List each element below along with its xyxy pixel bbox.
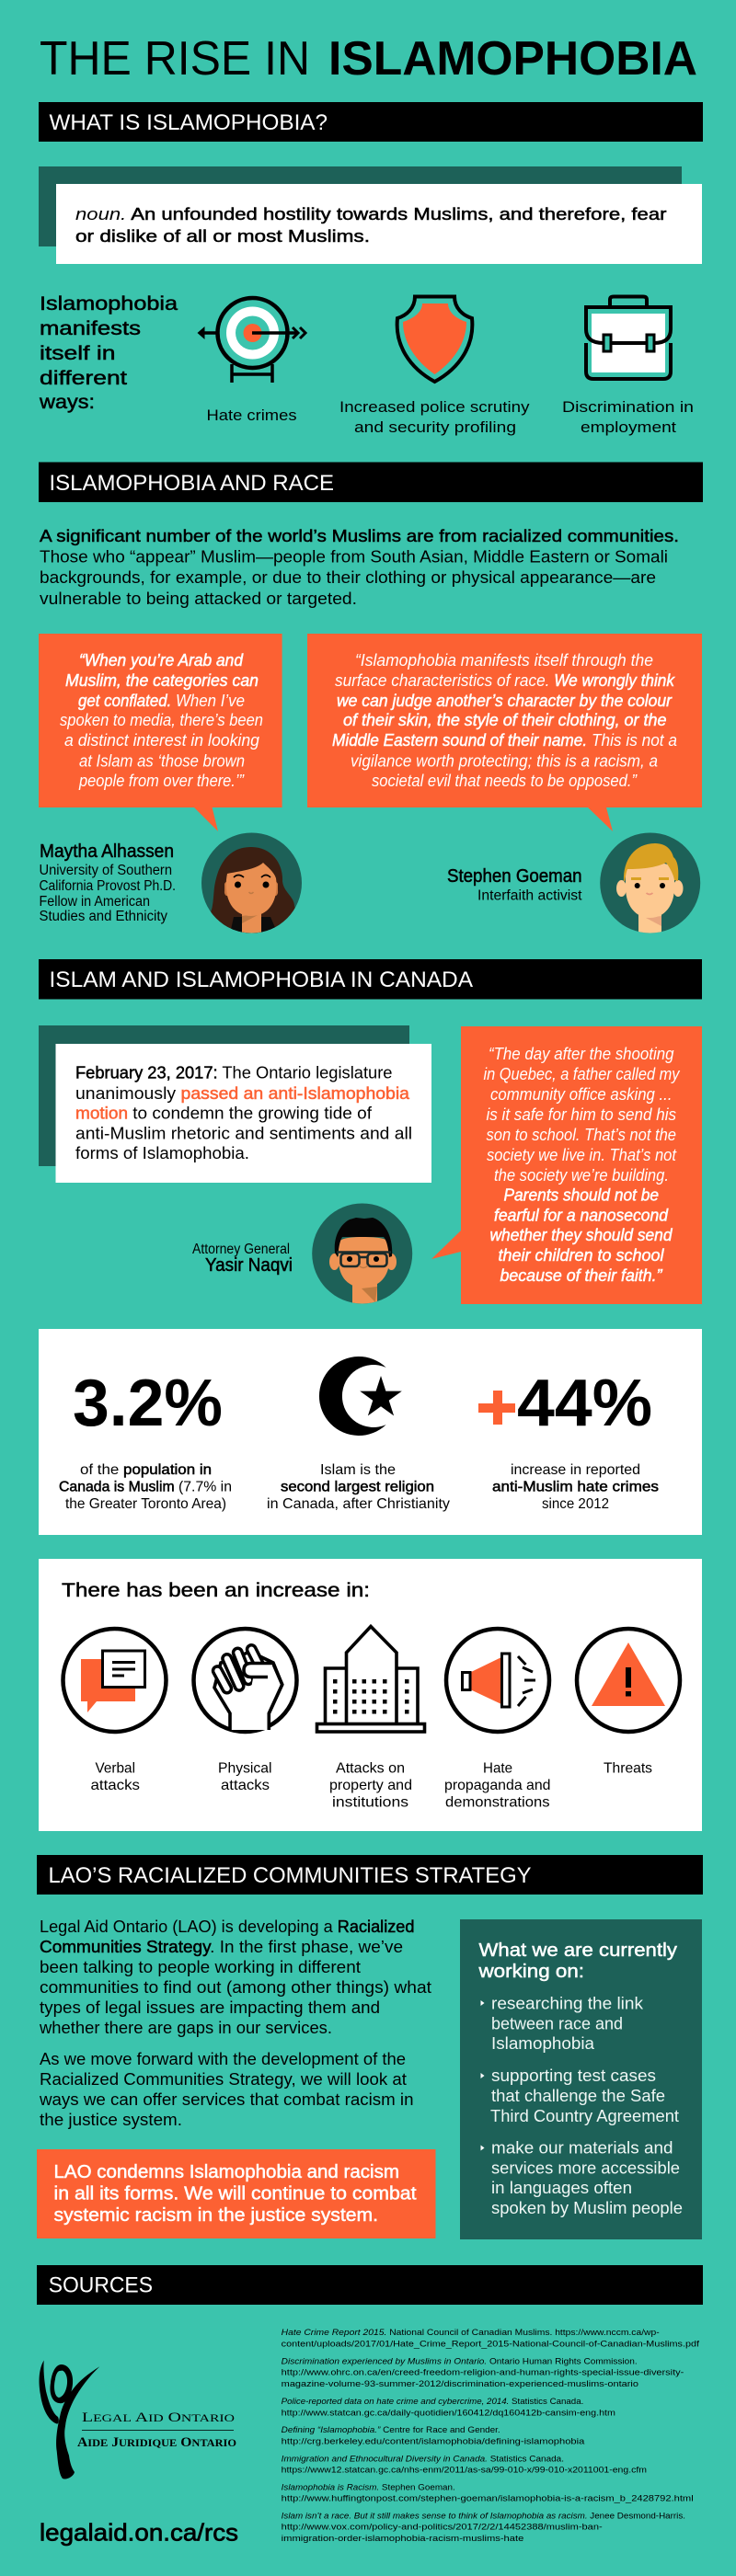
text: source list: http://crg.berkeley.edu/content/islamophobia/defining-islamophobia (282, 2436, 585, 2446)
caption: hate crimes: Hate crimes (206, 406, 296, 424)
text: strategy description: ways we can offer services that combat racism in (39, 2089, 414, 2109)
callout: quote from Yasir Naqvi: community office asking ... (490, 1085, 672, 1104)
text: strategy description: As we move forward with the development of the (40, 2049, 406, 2068)
caption: second largest religion: Islam is the (320, 1462, 396, 1478)
text: source list: immigration-order-islamophobia-racism-muslims-hate (282, 2534, 523, 2544)
text: strategy description: whether there are gaps in our services. (39, 2018, 332, 2037)
text: manifests itself: ways: (39, 392, 95, 413)
label: threats: Threats (604, 1760, 652, 1777)
callout: quote from Yasir Naqvi: is it safe for him to send his (486, 1105, 676, 1124)
section heading: lao strategy: LAO’S RACIALIZED COMMUNITIES STRATEGY (48, 1863, 532, 1888)
icon: speech bubbles (63, 1629, 166, 1732)
section heading: lao strategy (37, 1855, 703, 1895)
title: ISLAMOPHOBIA (328, 32, 697, 86)
motion text: anti-Muslim rhetoric and sentiments and all (75, 1124, 412, 1142)
callout: quote from Yasir Naqvi: fearful for a nanosecond (494, 1207, 669, 1225)
caption: police scrutiny: and security profiling (354, 418, 516, 436)
label: physical attacks (218, 1760, 272, 1793)
motion text: motion to condemn the growing tide of (75, 1104, 373, 1122)
panel: current work (460, 1919, 702, 2239)
callout: quote from Yasir Naqvi: because of their faith.” (500, 1266, 662, 1285)
bullet: materials and services: spoken by Muslim people (491, 2199, 683, 2217)
panel: ontario legislature motion (39, 1025, 431, 1183)
text: source list: Hate Crime Report 2015. National Council of Canadian Muslims. https://www.nccm.ca/wp- (282, 2328, 660, 2338)
caption: hate crime increase: increase in reported (511, 1462, 640, 1478)
text: manifests itself (39, 293, 178, 413)
logo figure (40, 2360, 99, 2479)
icon: briefcase (586, 296, 671, 379)
callout: quote from Yasir Naqvi: the society we’re building. (494, 1166, 669, 1185)
section heading: what is islamophobia: WHAT IS ISLAMOPHOBIA? (50, 110, 328, 135)
section heading: islam and islamophobia in canada (39, 959, 702, 999)
text: source list: content/uploads/2017/01/Hate_Crime_Report_2015-National-Council-of-Canadian-Muslims.pdf (282, 2339, 699, 2349)
panel heading: What we are currently (478, 1940, 678, 1961)
callout: quote from Yasir Naqvi: son to school. That’s not the (486, 1126, 676, 1144)
text: racialized communities paragraph: A significant number of the world’s Muslims are from racialized communities. (40, 526, 679, 545)
attribution: Yasir Naqvi: Attorney General (192, 1242, 290, 1257)
logo wordmark: L EGAL A ID O NTARIO (82, 2410, 235, 2425)
callout: quote from Yasir Naqvi (431, 1026, 702, 1304)
attribution: Maytha Alhassen: University of Southern (39, 863, 172, 878)
label: physical attacks: Physical (218, 1760, 272, 1777)
caption: hate crime increase (492, 1462, 659, 1512)
caption: second largest religion (267, 1462, 450, 1512)
label: attacks on property: property and (329, 1778, 412, 1793)
callout: quote from Stephen Goeman: vigilance worth protecting; this is a racism, a (351, 752, 658, 771)
stat: 3.2%: 3.2% (73, 1367, 223, 1440)
section heading: sources: SOURCES (49, 2273, 153, 2298)
callout: LAO condemns: in all its forms. We will continue to combat (53, 2183, 417, 2204)
icon: warning triangle (577, 1629, 680, 1732)
callout: quote from Maytha Alhassen: at Islam as ‘those brown (79, 752, 245, 771)
section heading: islamophobia and race: ISLAMOPHOBIA AND RACE (50, 471, 334, 496)
section heading: islam and islamophobia in canada: ISLAM AND ISLAMOPHOBIA IN CANADA (50, 967, 474, 992)
section heading: islamophobia and race (39, 462, 703, 502)
bullet: researching the link (480, 1994, 644, 2053)
text: source list: Islamophobia is Racism. Stephen Goeman. (282, 2482, 455, 2492)
text: manifests itself: different (40, 368, 127, 389)
callout: quote from Maytha Alhassen: spoken to media, there’s been (60, 711, 263, 729)
callout: LAO condemns (37, 2149, 436, 2238)
stat: 44%: 44% (517, 1367, 652, 1440)
title (40, 32, 697, 86)
logo wordmark (77, 2410, 236, 2450)
text: strategy description (39, 1917, 431, 2129)
text: source list: Discrimination experienced by Muslims in Ontario. Ontario Human Rights Commission. (282, 2356, 638, 2366)
text: source list: http://www.vox.com/policy-and-politics/2017/2/2/14452388/muslim-ban- (282, 2523, 603, 2533)
callout: quote from Maytha Alhassen: get conflated. When I’ve (78, 692, 245, 710)
text: source list: Immigration and Ethnocultural Diversity in Canada. Statistics Canada. (282, 2454, 564, 2464)
motion text: February 23, 2017: The Ontario legislature (75, 1063, 392, 1082)
title: THE RISE IN (40, 32, 310, 86)
callout: quote from Maytha Alhassen: Muslim, the categories can (65, 671, 259, 690)
icon: building (316, 1626, 425, 1732)
label: attacks on property (329, 1760, 412, 1810)
icon: plus sign (478, 1391, 515, 1425)
bullet: researching the link: between race and (491, 2014, 623, 2032)
bullet: supporting test cases (480, 2067, 679, 2125)
text: source list: http://www.ohrc.on.ca/en/creed-freedom-religion-and-human-rights-special-issue-diversity- (282, 2368, 684, 2378)
callout: quote from Stephen Goeman: Middle Eastern sound of their name. This is not a (332, 731, 677, 750)
attribution: Maytha Alhassen: California Provost Ph.D. (39, 878, 176, 894)
callout: quote from Stephen Goeman: we can judge another’s character by the colour (337, 692, 673, 710)
text: strategy description: communities to find out (among other things) what (40, 1977, 431, 1997)
label: hate propaganda: demonstrations (445, 1795, 550, 1810)
attribution: Maytha Alhassen: Fellow in American (39, 894, 150, 910)
callout: quote from Maytha Alhassen (39, 634, 282, 831)
label: hate propaganda: propaganda and (444, 1778, 550, 1793)
attribution: Stephen Goeman: Stephen Goeman (447, 866, 581, 887)
text: strategy description: Legal Aid Ontario (LAO) is developing a Racialized (40, 1917, 414, 1936)
motion text (75, 1063, 412, 1162)
text: strategy description: Racialized Communities Strategy, we will look at (40, 2069, 407, 2089)
caption: second largest religion: in Canada, after Christianity (267, 1496, 450, 1512)
callout: quote from Yasir Naqvi: Parents should not be (504, 1186, 659, 1205)
caption: hate crime increase: anti-Muslim hate crimes (492, 1479, 659, 1495)
text: strategy description: types of legal issues are impacting them and (40, 1998, 380, 2017)
icon: portrait of Stephen Goeman (600, 833, 700, 938)
callout: quote from Maytha Alhassen: people from over there.’” (78, 772, 245, 790)
callout: quote from Maytha Alhassen: a distinct interest in looking (64, 731, 259, 750)
text: source list: Defining “Islamophobia.” Centre for Race and Gender. (282, 2425, 500, 2435)
panel heading: There has been an increase in: (62, 1579, 370, 1601)
panel heading: working on: (477, 1961, 584, 1982)
callout: quote from Stephen Goeman: societal evil that needs to be opposed.” (372, 772, 638, 790)
text: source list: http://www.statcan.gc.ca/daily-quotidien/160412/dq160412b-cansim-eng.htm (282, 2408, 615, 2418)
icon: megaphone (446, 1629, 549, 1732)
callout: LAO condemns: LAO condemns Islamophobia and racism (53, 2162, 399, 2182)
text: racialized communities paragraph: backgrounds, for example, or due to their clothing or physical appearance—are (40, 567, 656, 587)
definition text (75, 204, 666, 246)
section heading: sources (37, 2265, 703, 2305)
callout: quote from Stephen Goeman: surface characteristics of race. We wrongly think (335, 671, 675, 690)
caption: discrimination: Discrimination in (562, 398, 694, 416)
callout: quote from Maytha Alhassen: “When you’re Arab and (79, 651, 244, 670)
text: strategy description: Communities Strategy. In the first phase, we’ve (40, 1937, 403, 1956)
label: attacks on property: institutions (332, 1795, 408, 1810)
label: verbal attacks (90, 1760, 140, 1793)
icon: target with arrow (197, 298, 305, 383)
caption: population: of the population in (80, 1462, 212, 1478)
text: manifests itself: manifests (40, 318, 141, 339)
caption: population: the Greater Toronto Area) (65, 1496, 226, 1512)
callout: quote from Yasir Naqvi: society we live in. That’s not (487, 1146, 677, 1164)
bullet: materials and services: in languages often (491, 2179, 632, 2197)
text: manifests itself: Islamophobia (40, 293, 178, 315)
icon: portrait of Yasir Naqvi (312, 1203, 412, 1306)
motion text: unanimously passed an anti-Islamophobia (75, 1083, 410, 1103)
attribution: Maytha Alhassen: Studies and Ethnicity (39, 909, 167, 924)
caption: discrimination (562, 398, 694, 436)
attribution: Yasir Naqvi: Yasir Naqvi (205, 1255, 293, 1276)
caption: discrimination: employment (581, 418, 676, 436)
bullet: researching the link: Islamophobia (491, 2034, 595, 2053)
text: racialized communities paragraph: vulnerable to being attacked or targeted. (40, 589, 357, 608)
caption: police scrutiny (339, 398, 530, 436)
text: source list (282, 2328, 699, 2544)
callout: LAO condemns: systemic racism in the justice system. (53, 2205, 378, 2226)
label: hate propaganda: Hate (483, 1760, 512, 1777)
bullet: supporting test cases: supporting test cases (491, 2067, 656, 2085)
icon: crescent and star (319, 1357, 402, 1436)
label: hate propaganda (444, 1760, 550, 1810)
label: verbal attacks: attacks (90, 1778, 140, 1793)
text: source list: http://www.huffingtonpost.com/stephen-goeman/islamophobia-is-a-racism_b_2428792.html (282, 2494, 694, 2504)
caption: population (59, 1462, 232, 1512)
callout: quote from Stephen Goeman: “Islamophobia manifests itself through the (355, 651, 653, 670)
text: manifests itself: itself in (40, 343, 116, 364)
attribution: Stephen Goeman: Interfaith activist (477, 888, 582, 903)
bullet: materials and services: make our materials and (491, 2139, 673, 2158)
caption: police scrutiny: Increased police scrutiny (339, 398, 530, 416)
attribution: Maytha Alhassen (39, 841, 176, 924)
bullet: supporting test cases: Third Country Agreement (490, 2107, 679, 2125)
caption: population: Canada is Muslim (7.7% in (59, 1479, 232, 1495)
icon: raised fist (193, 1629, 296, 1732)
logo: Legal Aid Ontario (40, 2360, 236, 2479)
callout: quote from Yasir Naqvi: whether they should send (489, 1226, 673, 1244)
panel: definition (39, 166, 702, 264)
attribution: Maytha Alhassen: Maytha Alhassen (40, 841, 174, 862)
definition text: noun. An unfounded hostility towards Muslims, and therefore, fear (75, 204, 666, 223)
logo wordmark: AIDE JURIDIQUE ONTARIO (77, 2435, 236, 2450)
text: source list: Police-reported data on hate crime and cybercrime, 2014. Statistics Canada. (282, 2397, 583, 2407)
text: strategy description: the justice system. (40, 2110, 182, 2129)
section heading: what is islamophobia (39, 102, 703, 142)
label: attacks on property: Attacks on (336, 1760, 405, 1777)
text: racialized communities paragraph: Those who “appear” Muslim—people from South Asian, Middle Eastern or Somali (40, 546, 668, 567)
definition text: or dislike of all or most Muslims. (75, 226, 370, 246)
caption: second largest religion: second largest religion (281, 1479, 434, 1495)
text: racialized communities paragraph (40, 526, 679, 608)
attribution: Stephen Goeman (447, 866, 582, 903)
callout: quote from Yasir Naqvi: in Quebec, a father called my (484, 1065, 680, 1083)
text: source list: magazine-volume-93-summer-2012/discrimination-experienced-muslims-ontario (282, 2379, 638, 2389)
bullet: materials and services: services more accessible (491, 2159, 680, 2178)
panel heading (477, 1940, 678, 1982)
icon: portrait of Maytha Alhassen (201, 833, 302, 938)
callout: quote from Yasir Naqvi: their children to school (499, 1246, 664, 1265)
website url: legalaid.on.ca/rcs (40, 2519, 238, 2547)
callout: quote from Stephen Goeman (307, 634, 702, 831)
label: verbal attacks: Verbal (96, 1760, 135, 1777)
panel: statistics (39, 1329, 702, 1535)
text: source list: https://www12.statcan.gc.ca/nhs-enm/2011/as-sa/99-010-x/99-010-x2011001-eng.cfm (282, 2466, 647, 2476)
bullet: researching the link: researching the link (491, 1994, 644, 2012)
callout: quote from Stephen Goeman: of their skin, the style of their clothing, or the (343, 711, 666, 729)
callout: quote from Yasir Naqvi: “The day after the shooting (489, 1045, 673, 1063)
caption: hate crime increase: since 2012 (542, 1496, 609, 1512)
text: strategy description: been talking to people working in different (40, 1957, 361, 1976)
text: source list: Islam isn’t a race. But it still makes sense to think of Islamophobia as racism. Jenee Desmond-Harris. (282, 2511, 685, 2521)
motion text: forms of Islamophobia. (75, 1143, 249, 1162)
bullet: supporting test cases: that challenge the Safe (491, 2087, 665, 2105)
attribution: Yasir Naqvi (192, 1242, 293, 1276)
icon: shield (397, 296, 472, 382)
bullet: materials and services (480, 2139, 683, 2217)
label: physical attacks: attacks (221, 1778, 270, 1793)
panel: increase in attacks (39, 1559, 702, 1831)
